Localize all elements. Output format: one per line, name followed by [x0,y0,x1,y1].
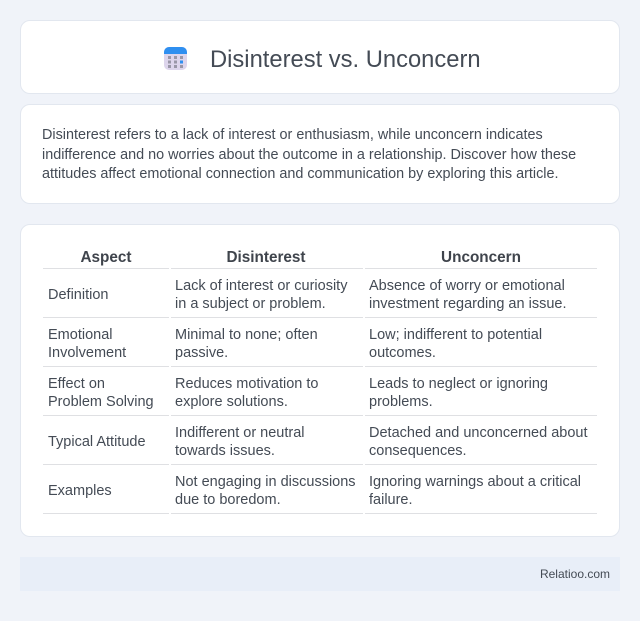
panel: introduction [20,104,620,204]
icon: calendar [164,47,187,70]
cell: Disinterest examples: due to boredom. [175,492,281,508]
row label: Effect on Problem Solving: Problem Solving [48,394,154,410]
row label: Definition: Definition [48,287,108,303]
cell: Disinterest effect: explore solutions. [175,394,288,410]
cell: Unconcern examples: Ignoring warnings about a critical [369,474,581,490]
cell: Disinterest examples: Not engaging in discussions [175,474,356,490]
row label: Effect on Problem Solving [48,376,154,410]
text block: introduction: indifference and no worries about the outcome in a relationship. Discover how these [42,146,576,162]
title: Disinterest vs. Unconcern [210,46,481,73]
row label: Effect on Problem Solving: Effect on [48,376,105,392]
cell: Disinterest attitude [175,425,305,459]
table header: Aspect: Aspect [80,249,132,266]
cell: Unconcern definition [369,278,566,312]
text block: introduction: attitudes affect emotional connection and communication by exploring this article. [42,166,558,182]
text block: introduction [42,127,576,182]
cell: Unconcern effect [369,376,548,410]
panel: comparison table [20,224,620,537]
cell: Disinterest involvement: Minimal to none; often [175,327,318,343]
cell: Disinterest attitude: towards issues. [175,443,275,459]
footer bar [20,557,620,591]
cell: Unconcern attitude: Detached and unconcerned about [369,425,587,441]
cell: Disinterest effect: Reduces motivation to [175,376,318,392]
cell: Disinterest definition: in a subject or problem. [175,296,326,312]
cell: Unconcern involvement: Low; indifferent to potential [369,327,542,343]
cell: Unconcern examples [369,474,581,508]
row label: Typical Attitude: Typical Attitude [48,434,146,450]
cell: Disinterest involvement: passive. [175,345,228,361]
cell: Unconcern attitude: consequences. [369,443,467,459]
cell: Unconcern effect: problems. [369,394,433,410]
table header: Disinterest: Disinterest [226,249,306,266]
cell: Disinterest attitude: Indifferent or neutral [175,425,305,441]
cell: Unconcern examples: failure. [369,492,413,508]
table dividers [43,268,597,514]
footer text: Relatioo.com [540,567,610,581]
text block: introduction: Disinterest refers to a lack of interest or enthusiasm, while unconcern indicates [42,127,543,143]
cell: Disinterest definition [175,278,348,312]
cell: Unconcern attitude [369,425,588,459]
cell: Unconcern effect: Leads to neglect or ignoring [369,376,548,392]
cell: Unconcern definition: investment regarding an issue. [369,296,566,312]
row label: Emotional Involvement: Involvement [48,345,126,361]
row label: Examples: Examples [48,483,112,499]
table header: Unconcern: Unconcern [441,249,521,266]
row label: Emotional Involvement [48,327,126,361]
cell: Unconcern involvement: outcomes. [369,345,436,361]
cell: Unconcern involvement [369,327,542,361]
row label: Emotional Involvement: Emotional [48,327,112,343]
cell: Disinterest involvement [175,327,318,361]
cell: Disinterest definition: Lack of interest or curiosity [175,278,347,294]
cell: Unconcern definition: Absence of worry or emotional [369,278,565,294]
cell: Disinterest effect [175,376,318,410]
cell: Disinterest examples [175,474,356,508]
panel: title card [20,20,620,94]
